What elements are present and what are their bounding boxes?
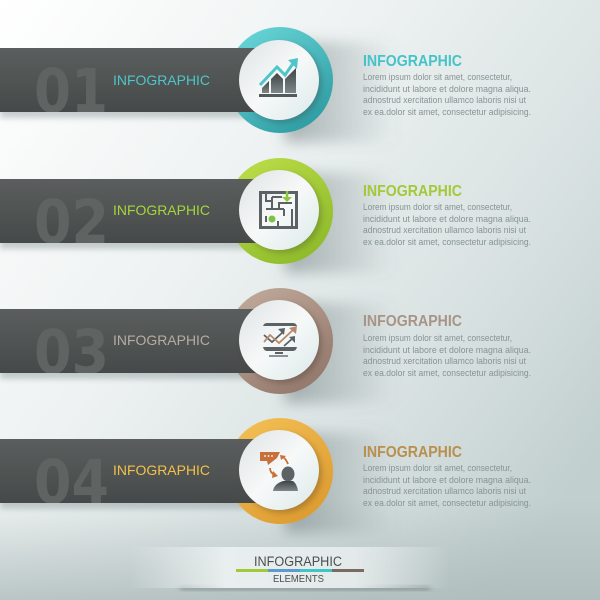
side heading 04: INFOGRAPHIC xyxy=(363,444,462,461)
white disc 03 xyxy=(239,300,319,380)
description 01: incididunt ut labore et dolore magna aliqua. xyxy=(363,84,531,95)
description 01 xyxy=(363,72,531,118)
description 01: Lorem ipsum dolor sit amet, consectetur, xyxy=(363,72,512,83)
icon: monitor with arrows xyxy=(263,323,297,357)
white disc 04 xyxy=(239,430,319,510)
number 01: 01 xyxy=(34,56,108,127)
description 04: incididunt ut labore et dolore magna aliqua. xyxy=(363,475,531,486)
number 04: 04 xyxy=(34,447,109,518)
colored disc 02 xyxy=(227,158,333,264)
description 03: adnostrud xercitation ullamco laboris nisi ut xyxy=(363,356,526,367)
white disc 02 xyxy=(239,170,319,250)
number 03: 03 xyxy=(34,317,109,388)
description 04 xyxy=(363,463,531,509)
dark band 03 xyxy=(0,309,256,373)
side heading 01: INFOGRAPHIC xyxy=(363,53,462,70)
band label 04: INFOGRAPHIC xyxy=(113,462,210,478)
footer title: INFOGRAPHIC xyxy=(254,554,342,569)
description 03: incididunt ut labore et dolore magna aliqua. xyxy=(363,345,531,356)
dark band 01 xyxy=(0,48,256,112)
description 02: ex ea.dolor sit amet, consectetur adipisicing. xyxy=(363,237,531,248)
band label 01: INFOGRAPHIC xyxy=(113,72,210,88)
description 03: ex ea.dolor sit amet, consectetur adipisicing. xyxy=(363,368,531,379)
description 03: Lorem ipsum dolor sit amet, consectetur, xyxy=(363,333,512,344)
description 02: incididunt ut labore et dolore magna aliqua. xyxy=(363,214,531,225)
number 02: 02 xyxy=(34,187,109,258)
colored disc 01 xyxy=(227,27,333,133)
panel: step 01 xyxy=(0,27,531,142)
color key line xyxy=(236,569,364,572)
colored disc 04 xyxy=(227,418,333,524)
side heading 02: INFOGRAPHIC xyxy=(363,183,462,200)
icon: person with speech bubble xyxy=(260,452,298,491)
description 04: adnostrud xercitation ullamco laboris nisi ut xyxy=(363,486,526,497)
band label 03: INFOGRAPHIC xyxy=(113,332,210,348)
icon: rising chart xyxy=(259,58,298,97)
dark band 02 xyxy=(0,179,256,243)
description 01: adnostrud xercitation ullamco laboris nisi ut xyxy=(363,95,526,106)
description 04: Lorem ipsum dolor sit amet, consectetur, xyxy=(363,463,512,474)
footer subtitle: ELEMENTS xyxy=(273,573,324,585)
panel: step 02 xyxy=(0,158,531,273)
colored disc 03 xyxy=(227,288,333,394)
panel: step 03 xyxy=(0,288,531,403)
icon: maze xyxy=(260,191,296,228)
side heading 03: INFOGRAPHIC xyxy=(363,313,462,330)
dark band 04 xyxy=(0,439,256,503)
description 02: Lorem ipsum dolor sit amet, consectetur, xyxy=(363,202,512,213)
description 04: ex ea.dolor sit amet, consectetur adipisicing. xyxy=(363,498,531,509)
white disc 01 xyxy=(239,40,319,120)
panel: step 04 xyxy=(0,418,531,533)
footer title strip xyxy=(130,547,450,590)
description 02: adnostrud xercitation ullamco laboris nisi ut xyxy=(363,225,526,236)
band label 02: INFOGRAPHIC xyxy=(113,202,210,218)
description 01: ex ea.dolor sit amet, consectetur adipisicing. xyxy=(363,107,531,118)
description 03 xyxy=(363,333,531,379)
description 02 xyxy=(363,202,531,248)
